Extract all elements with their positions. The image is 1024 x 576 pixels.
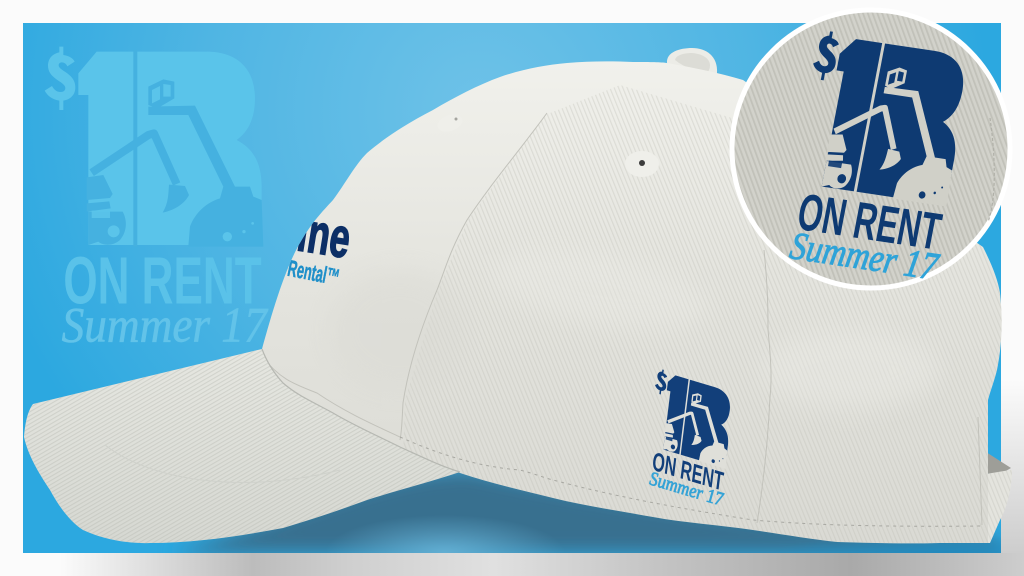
side logo text: Summer 17: Summer 17 bbox=[648, 468, 725, 512]
side embroidered logo bbox=[642, 368, 738, 512]
front logo: partial brand name bbox=[287, 222, 349, 283]
hat visor bbox=[24, 349, 460, 543]
hat strap tab bbox=[982, 452, 1012, 543]
eyelet: side bbox=[625, 151, 659, 177]
callout disc bbox=[732, 10, 1010, 288]
callout logo text: ON RENT: ON RENT bbox=[793, 183, 946, 261]
crown twill texture bbox=[404, 86, 1002, 544]
hat crown bbox=[262, 61, 1002, 543]
crown panel seams bbox=[263, 113, 982, 526]
ghost text: ON RENT: ON RENT bbox=[63, 244, 262, 318]
ghost text: Summer 17: Summer 17 bbox=[62, 297, 268, 353]
brand wordmark: BlueLine bbox=[195, 184, 355, 270]
callout logo text: Summer 17: Summer 17 bbox=[787, 225, 943, 289]
eyelet: front bbox=[435, 111, 465, 135]
page shadow under panel bbox=[60, 380, 1024, 576]
circular zoom callout bbox=[732, 10, 1010, 289]
ghost logo on background bbox=[45, 47, 268, 353]
hat cast shadow on panel bbox=[170, 470, 1001, 553]
brand subline: Rental™ bbox=[286, 255, 342, 290]
callout logo bbox=[775, 30, 980, 289]
hat button bbox=[667, 48, 717, 74]
side logo text: ON RENT: ON RENT bbox=[651, 447, 725, 497]
